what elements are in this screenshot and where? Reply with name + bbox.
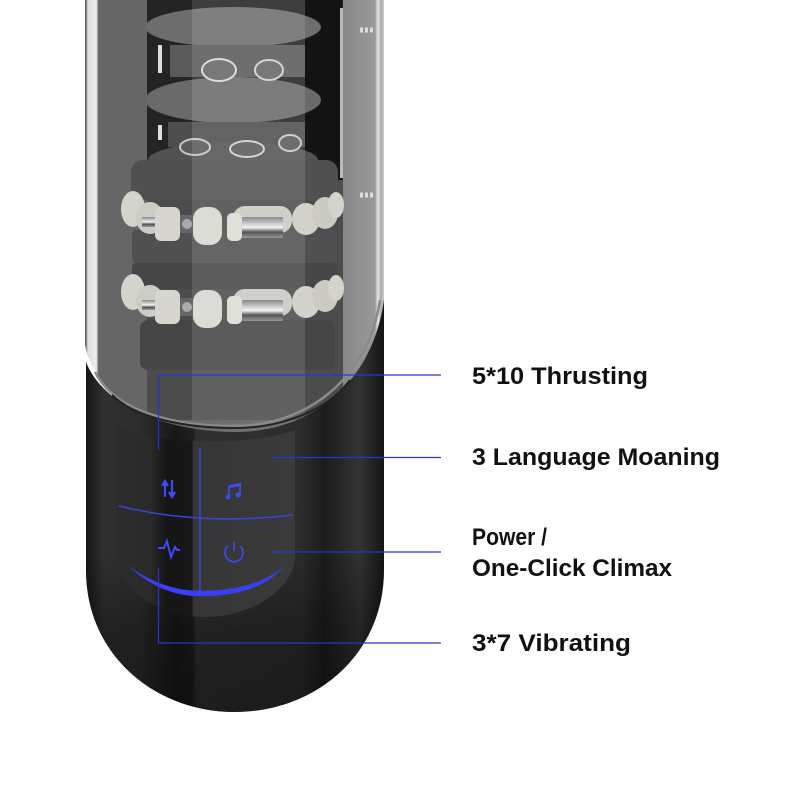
black base (86, 300, 384, 712)
bead ring, upper (121, 191, 344, 245)
clear upper chamber (85, 0, 384, 440)
callout: thrusting: 5*10 Thrusting (472, 363, 648, 390)
callout: power (272, 524, 673, 582)
callout: moaning: 3 Language Moaning (472, 444, 720, 471)
callout: vibrating (158, 568, 631, 657)
icon: power (225, 542, 243, 562)
inner sleeve (131, 0, 343, 420)
device illustration (85, 0, 384, 712)
glow arc (130, 567, 282, 596)
icon: thrusting arrows (162, 480, 175, 497)
bead ring, lower (121, 274, 344, 328)
callout: power: Power / (472, 524, 547, 551)
icon: music note (226, 483, 241, 500)
control panel (117, 426, 295, 617)
callout: power: One-Click Climax (472, 555, 673, 582)
callout: thrusting (158, 363, 648, 450)
panel divider lines (119, 448, 293, 592)
icon: vibration pulse (158, 541, 180, 557)
callout: vibrating: 3*7 Vibrating (472, 630, 631, 657)
